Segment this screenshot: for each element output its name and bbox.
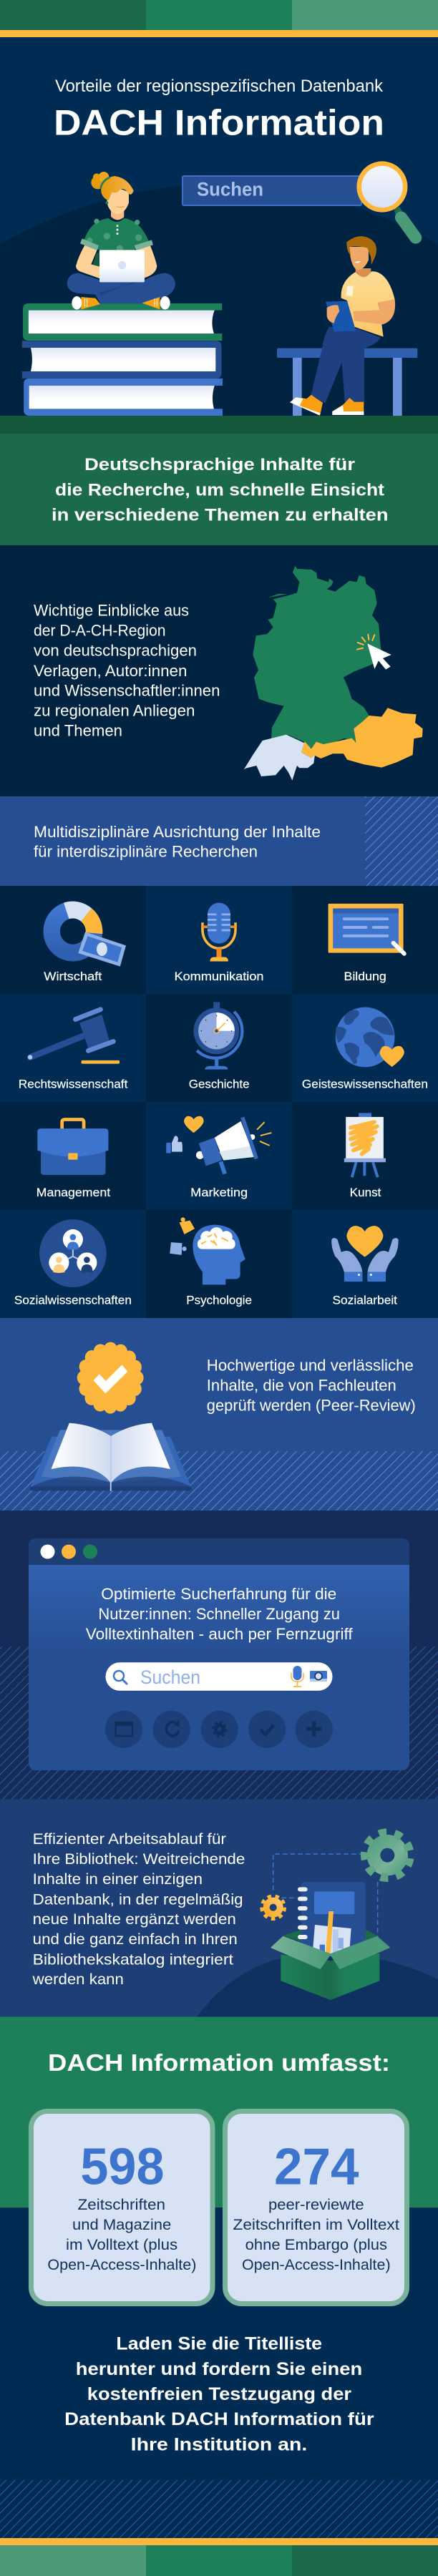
- labels: disciplines: [14, 970, 428, 1307]
- icon: magnifying glass: [356, 161, 416, 238]
- text: workflow: Inhalte in einer einzigen: [33, 1870, 203, 1888]
- labels: disciplines: Wirtschaft: [44, 970, 102, 983]
- text: workflow: Effizienter Arbeitsablauf für: [33, 1830, 226, 1848]
- text: call to action: Laden Sie die Titelliste: [116, 2334, 322, 2354]
- icon: cursor: [357, 635, 391, 670]
- text: region insights: [34, 601, 220, 739]
- panel: peer review: [0, 1318, 438, 1511]
- text: workflow: werden kann: [32, 1971, 124, 1988]
- text: workflow: Ihre Bibliothek: Weitreichende: [33, 1850, 245, 1868]
- card: 598 journals: 598: [80, 2138, 165, 2195]
- panel: green headline: [0, 416, 438, 545]
- icon: blackboard: [328, 904, 404, 954]
- search bar: [182, 176, 361, 205]
- labels: disciplines: Psychologie: [186, 1294, 252, 1307]
- text: region insights: zu regionalen Anliegen: [34, 702, 195, 720]
- panel: hero: [0, 37, 438, 416]
- text: region insights: der D-A-CH-Region: [34, 621, 166, 640]
- icon: earth with heart: [336, 1008, 404, 1067]
- illustration: box with notebook and gears: [262, 1830, 413, 2000]
- icons: disciplines: [28, 902, 404, 1287]
- icon: check badge and open book: [30, 1347, 191, 1491]
- labels: disciplines: Sozialarbeit: [332, 1294, 397, 1307]
- labels: disciplines: Kunst: [350, 1186, 381, 1199]
- text: call to action: [64, 2334, 374, 2454]
- panel: disciplines grid: [0, 886, 438, 1318]
- panel: multidisciplinary banner: [0, 796, 438, 886]
- toolbar buttons: [105, 1711, 333, 1748]
- heading: DACH Information umfasst:: [48, 2049, 390, 2076]
- text: peer review: [207, 1356, 416, 1414]
- text: region insights: und Wissenschaftler:innen: [34, 681, 220, 700]
- text: peer review: Inhalte, die von Fachleuten: [207, 1377, 396, 1395]
- icon: gavel: [28, 1010, 120, 1064]
- panel: green headline: die Recherche, um schnelle Einsicht: [55, 481, 384, 500]
- text: region insights: Wichtige Einblicke aus: [34, 601, 189, 619]
- panel: multidisciplinary banner: für interdisziplinäre Recherchen: [34, 843, 258, 861]
- icon: megaphone with heart and thumbs up: [166, 1116, 271, 1174]
- card: 598 journals: im Volltext (plus: [66, 2237, 177, 2253]
- search bar: Suchen: [197, 179, 263, 200]
- panel: footer bands: [0, 2480, 438, 2576]
- search field: Suchen: [140, 1667, 200, 1688]
- search field: [106, 1662, 332, 1691]
- icon: briefcase: [37, 1120, 108, 1175]
- icon: clock globe: [193, 1002, 242, 1070]
- card: 598 journals: Open-Access-Inhalte): [47, 2257, 196, 2273]
- card: 274 peer-reviewed journals: ohne Embargo (plus: [245, 2237, 387, 2253]
- icon: large gear: [362, 1830, 413, 1880]
- text: call to action: Datenbank DACH Information für: [64, 2409, 374, 2429]
- card: 274 peer-reviewed journals: Open-Access-Inhalte): [242, 2257, 391, 2273]
- labels: disciplines: Rechtswissenschaft: [19, 1078, 128, 1091]
- card: 598 journals: und Magazine: [72, 2217, 171, 2233]
- panel: top colour bands: [0, 0, 438, 37]
- text: peer review: Hochwertige und verlässliche: [207, 1356, 414, 1374]
- labels: disciplines: Sozialwissenschaften: [14, 1294, 132, 1307]
- card: 598 journals: [31, 2111, 213, 2304]
- icon: head with brain and puzzle pieces: [170, 1217, 245, 1284]
- icon: microphone: [203, 903, 235, 961]
- browser window: [29, 1538, 409, 1770]
- text: workflow: [32, 1830, 245, 1988]
- labels: disciplines: Geisteswissenschaften: [302, 1078, 428, 1091]
- text: workflow: und die ganz einfach in Ihren: [33, 1931, 238, 1948]
- panel: D-A-CH region: [0, 545, 438, 796]
- icon: hands holding heart: [331, 1226, 399, 1282]
- card: 274 peer-reviewed journals: Zeitschriften im Volltext: [233, 2217, 399, 2233]
- subtitle: Vorteile der regionsspezifischen Datenbank: [55, 77, 384, 96]
- panel: green headline: Deutschsprachige Inhalte für: [84, 455, 356, 474]
- labels: disciplines: Bildung: [344, 970, 386, 983]
- text: workflow: Datenbank, in der regelmäßig: [33, 1890, 243, 1908]
- text: call to action: herunter und fordern Sie einen: [76, 2359, 362, 2379]
- illustration: woman with laptop: [67, 172, 175, 310]
- text: search: Nutzer:innen: Schneller Zugang zu: [98, 1605, 340, 1623]
- text: search: [86, 1585, 353, 1643]
- text: region insights: von deutschsprachigen: [34, 642, 197, 660]
- icon: easel: [344, 1113, 386, 1177]
- text: search: Volltextinhalten - auch per Fernzugriff: [86, 1625, 353, 1643]
- icon: social network: [39, 1219, 107, 1287]
- map: Germany, Austria, Switzerland: [244, 566, 423, 781]
- panel: library workflow: [0, 1799, 438, 2016]
- card: 598 journals: Zeitschriften: [77, 2197, 165, 2213]
- labels: disciplines: Marketing: [190, 1186, 248, 1199]
- labels: disciplines: Management: [36, 1186, 111, 1199]
- text: peer review: geprüft werden (Peer-Review): [207, 1396, 416, 1414]
- card: 274 peer-reviewed journals: [225, 2111, 407, 2304]
- panel: green headline: in verschiedene Themen zu erhalten: [52, 506, 388, 525]
- title: DACH Information: [54, 103, 384, 143]
- text: call to action: kostenfreien Testzugang der: [87, 2384, 351, 2404]
- panel: DACH Information content: [0, 2016, 438, 2480]
- notebook: [298, 1882, 366, 1956]
- icon: donut chart and banknote: [52, 902, 126, 967]
- text: workflow: Bibliothekskatalog integriert: [33, 1951, 233, 1968]
- text: region insights: Verlagen, Autor:innen: [34, 662, 188, 680]
- panel: multidisciplinary banner: Multidisziplinäre Ausrichtung der Inhalte: [34, 823, 321, 841]
- illustration: man on bench with tablet: [277, 236, 417, 416]
- labels: disciplines: Geschichte: [189, 1078, 249, 1091]
- icon: small gear: [262, 1896, 284, 1918]
- card: 274 peer-reviewed journals: peer-reviewte: [268, 2197, 364, 2213]
- panel: search experience: [0, 1511, 438, 1800]
- text: search: Optimierte Sucherfahrung für die: [101, 1585, 336, 1603]
- text: workflow: neue Inhalte ergänzt werden: [33, 1911, 236, 1928]
- text: region insights: und Themen: [34, 721, 122, 739]
- card: 274 peer-reviewed journals: 274: [274, 2138, 359, 2195]
- illustration: stacked books: [22, 303, 223, 416]
- text: call to action: Ihre Institution an.: [131, 2434, 307, 2454]
- labels: disciplines: Kommunikation: [175, 970, 263, 983]
